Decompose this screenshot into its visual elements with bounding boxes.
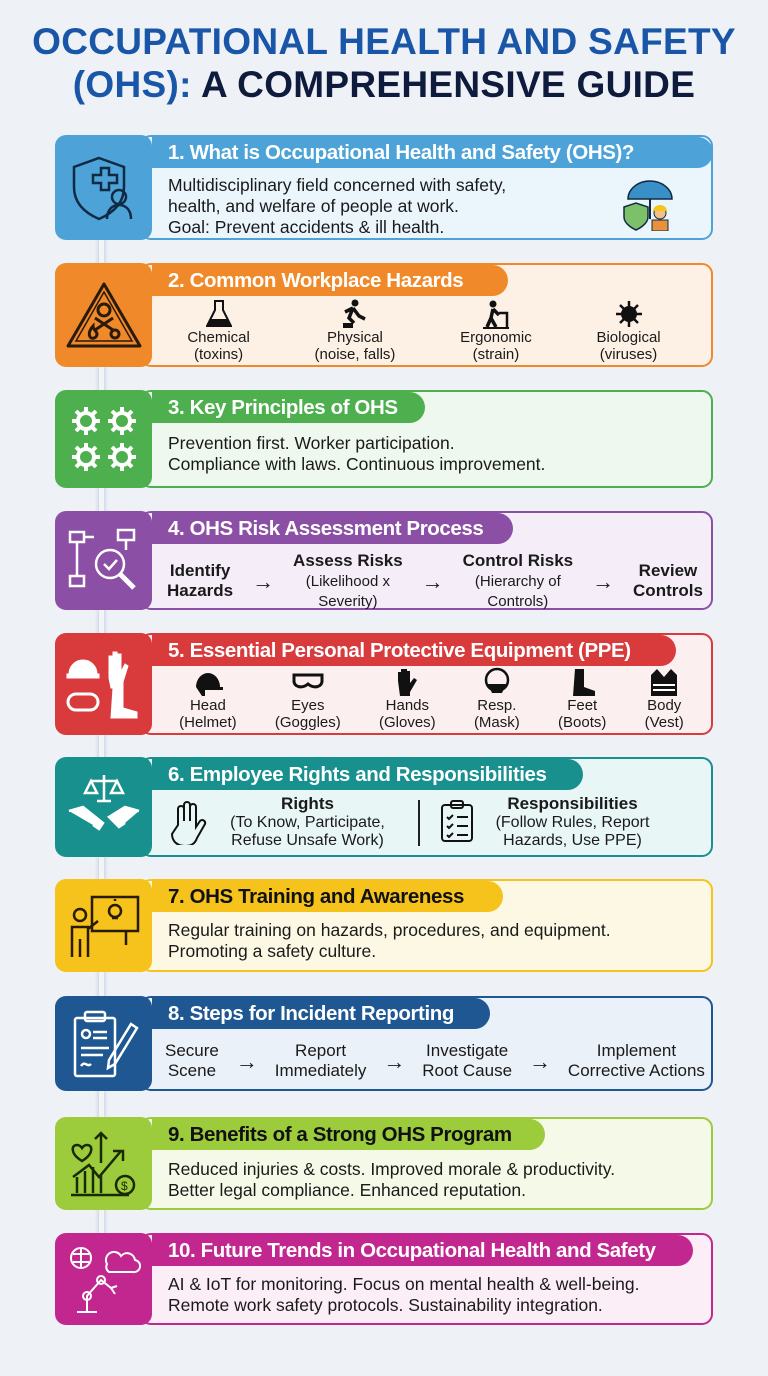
rights: Refuse Unsafe Work) xyxy=(231,832,384,849)
steps: Immediately xyxy=(275,1061,366,1080)
process steps: → xyxy=(422,568,444,594)
heading: 4. OHS Risk Assessment Process xyxy=(168,517,483,540)
panel 9: benefits xyxy=(55,1117,713,1210)
text: Reduced injuries & costs. Improved morale & productivity. xyxy=(168,1159,615,1179)
text: Remote work safety protocols. Sustainability integration. xyxy=(168,1295,603,1315)
responsibilities: (Follow Rules, Report xyxy=(496,814,649,831)
icon: shield with person xyxy=(55,135,152,240)
heading xyxy=(152,1119,545,1150)
heading xyxy=(152,1235,693,1266)
PPE icons row: (Boots) xyxy=(558,714,606,731)
process steps: Control Risks xyxy=(463,551,573,570)
panel 1: what is OHS xyxy=(55,135,713,240)
PPE icons row: (Gloves) xyxy=(379,714,436,731)
text: Better legal compliance. Enhanced reputation. xyxy=(168,1180,526,1200)
steps: Report xyxy=(295,1041,346,1060)
rights: Rights xyxy=(281,794,334,813)
icon: process magnifier xyxy=(55,511,152,610)
process steps: Hazards xyxy=(167,581,233,600)
chemical: (toxins) xyxy=(194,346,243,363)
heading: 5. Essential Personal Protective Equipment (PPE) xyxy=(168,639,631,662)
PPE icons row: Feet xyxy=(567,697,597,714)
icon: brain cloud robot arm xyxy=(55,1233,152,1325)
heading xyxy=(152,759,583,790)
ergonomic xyxy=(460,300,532,363)
PPE icons row: Resp. xyxy=(477,697,516,714)
ergonomic: Ergonomic xyxy=(460,329,532,346)
text xyxy=(168,175,506,237)
text: health, and welfare of people at work. xyxy=(168,196,459,216)
responsibilities: Hazards, Use PPE) xyxy=(503,832,642,849)
steps: → xyxy=(236,1048,258,1074)
rights: (To Know, Participate, xyxy=(230,814,385,831)
biological: (viruses) xyxy=(600,346,657,363)
title: (OHS): A COMPREHENSIVE GUIDE xyxy=(73,64,695,105)
heading xyxy=(152,265,508,296)
panel 10: future trends xyxy=(55,1233,713,1325)
PPE icons row xyxy=(179,668,684,731)
rights xyxy=(171,794,385,849)
text xyxy=(168,433,545,474)
steps: Implement xyxy=(597,1041,676,1060)
steps: → xyxy=(383,1048,405,1074)
heading: 1. What is Occupational Health and Safety (OHS)? xyxy=(168,141,634,164)
panel 3: key principles xyxy=(55,390,713,488)
heading: 6. Employee Rights and Responsibilities xyxy=(168,763,547,786)
heading: 3. Key Principles of OHS xyxy=(168,396,398,419)
title: OCCUPATIONAL HEALTH AND SAFETY xyxy=(32,21,736,62)
panel 6: rights and responsibilities xyxy=(55,757,713,857)
PPE icons row: (Vest) xyxy=(645,714,684,731)
hazard icons row xyxy=(187,300,661,363)
steps: Scene xyxy=(168,1061,216,1080)
text: Compliance with laws. Continuous improvement. xyxy=(168,454,545,474)
heading xyxy=(152,881,503,912)
steps: → xyxy=(529,1048,551,1074)
heading: 7. OHS Training and Awareness xyxy=(168,885,464,908)
PPE icons row: (Goggles) xyxy=(275,714,341,731)
icon: presenter board xyxy=(55,879,152,972)
process steps: Controls xyxy=(633,581,703,600)
physical xyxy=(315,300,395,363)
heading xyxy=(152,998,490,1029)
panel 4: risk assessment xyxy=(55,511,713,610)
biological xyxy=(596,301,661,363)
physical: (noise, falls) xyxy=(315,346,395,363)
PPE icons row: Body xyxy=(647,697,681,714)
process steps: → xyxy=(252,568,274,594)
steps xyxy=(165,1041,705,1080)
icon: growth chart: $ xyxy=(120,1178,128,1192)
heading: 2. Common Workplace Hazards xyxy=(168,269,463,292)
text: Prevention first. Worker participation. xyxy=(168,433,455,453)
PPE icons row: (Mask) xyxy=(474,714,520,731)
steps: Root Cause xyxy=(422,1061,512,1080)
heading xyxy=(152,137,713,168)
heading: 8. Steps for Incident Reporting xyxy=(168,1002,454,1025)
process steps: (Likelihood x xyxy=(306,573,390,590)
text: Promoting a safety culture. xyxy=(168,941,376,961)
icon: growth chart xyxy=(55,1117,152,1210)
process steps: Review xyxy=(639,561,697,580)
icon: gears xyxy=(55,390,152,488)
process steps: Controls) xyxy=(487,593,548,610)
heading xyxy=(152,635,676,666)
PPE icons row: Eyes xyxy=(291,697,324,714)
process steps: (Hierarchy of xyxy=(475,573,561,590)
icon: PPE set xyxy=(55,633,152,735)
process steps xyxy=(167,551,703,610)
panel 8: incident reporting xyxy=(55,996,713,1091)
responsibilities: Responsibilities xyxy=(507,794,638,813)
text xyxy=(168,1159,615,1200)
PPE icons row: Hands xyxy=(386,697,429,714)
icon: warning triangle xyxy=(55,263,152,367)
PPE icons row: Head xyxy=(190,697,226,714)
steps: Corrective Actions xyxy=(568,1061,705,1080)
panel 2: hazards xyxy=(55,263,713,367)
icon: clipboard pen xyxy=(55,996,152,1091)
heading: 9. Benefits of a Strong OHS Program xyxy=(168,1123,512,1146)
biological: Biological xyxy=(596,329,661,346)
panel 5: PPE xyxy=(55,633,713,735)
responsibilities xyxy=(441,794,650,849)
process steps: Identify xyxy=(170,561,230,580)
heading xyxy=(152,392,425,423)
text xyxy=(168,920,611,961)
steps: Investigate xyxy=(426,1041,508,1060)
panel 7: training xyxy=(55,879,713,972)
title xyxy=(32,21,736,105)
process steps: Severity) xyxy=(318,593,377,610)
steps: Secure xyxy=(165,1041,219,1060)
process steps: → xyxy=(592,568,614,594)
icon: scale and handshake xyxy=(55,757,152,857)
chemical: Chemical xyxy=(187,329,250,346)
text: Regular training on hazards, procedures, and equipment. xyxy=(168,920,611,940)
text: Goal: Prevent accidents & ill health. xyxy=(168,217,444,237)
text xyxy=(168,1274,639,1315)
heading xyxy=(152,513,513,544)
ergonomic: (strain) xyxy=(473,346,519,363)
text: Multidisciplinary field concerned with safety, xyxy=(168,175,506,195)
icon: umbrella worker xyxy=(623,180,673,231)
chemical xyxy=(187,300,250,363)
physical: Physical xyxy=(327,329,383,346)
heading: 10. Future Trends in Occupational Health and Safety xyxy=(168,1239,656,1262)
PPE icons row: (Helmet) xyxy=(179,714,237,731)
process steps: Assess Risks xyxy=(293,551,403,570)
text: AI & IoT for monitoring. Focus on mental health & well-being. xyxy=(168,1274,639,1294)
